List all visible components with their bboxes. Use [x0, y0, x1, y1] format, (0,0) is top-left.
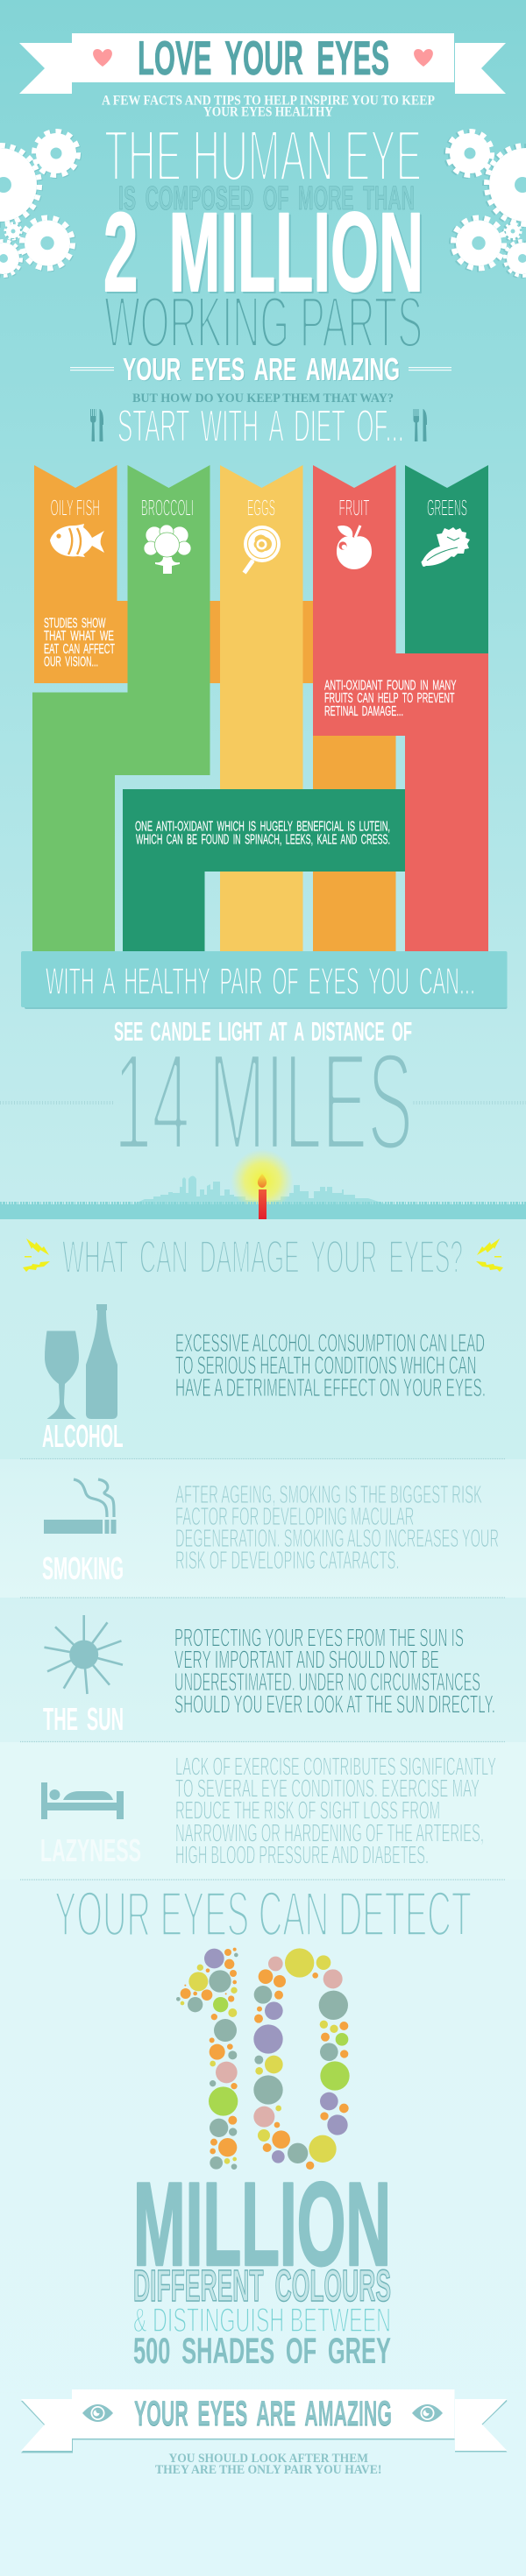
closing text	[155, 2451, 382, 2477]
digit one	[176, 1948, 238, 2170]
text: studies show: OUR VISION...	[44, 655, 98, 670]
ruler line left	[0, 1101, 114, 1105]
panel: alcohol	[42, 1304, 486, 1454]
label: alcohol: ALCOHOL	[42, 1418, 123, 1454]
icon: eye left	[82, 2404, 113, 2422]
number 10 made of coloured circles	[176, 1948, 350, 2170]
subtitle	[102, 93, 435, 119]
ribbon: eggs yellow	[220, 465, 303, 951]
food ribbon chart: GREENS	[427, 496, 467, 520]
icon: cutlery right	[414, 409, 427, 441]
text: lutein	[135, 820, 390, 848]
ruler line right	[414, 1101, 526, 1105]
food ribbon chart	[32, 465, 488, 951]
icon: gears right	[448, 131, 526, 276]
ribbon: broccoli green	[32, 465, 210, 951]
text: studies show: THAT WHAT WE	[44, 629, 114, 644]
ribbon: oily fish orange	[34, 465, 396, 951]
food ribbon chart: OILY FISH	[51, 496, 100, 520]
ribbon: greens dark green	[405, 465, 488, 653]
skyline and candle	[0, 1149, 526, 1219]
text: studies show: STUDIES SHOW	[44, 617, 106, 632]
icon: cutlery left	[90, 409, 103, 441]
divider	[20, 1879, 506, 1881]
icon: sun	[44, 1615, 123, 1694]
ground strip	[0, 1203, 526, 1219]
icon: frying pan with egg	[244, 526, 281, 571]
icon: cigarette	[44, 1479, 116, 1534]
text: anti-oxidant fruits	[324, 678, 456, 719]
icon: bed	[41, 1782, 124, 1819]
closing text: YOU SHOULD LOOK AFTER THEM	[168, 2451, 368, 2466]
label: the sun: THE SUN	[43, 1701, 124, 1737]
label: lazyness: LAZYNESS	[40, 1832, 141, 1868]
ribbon: greens lower box	[123, 789, 405, 951]
text: smoking body	[175, 1481, 499, 1575]
label: smoking: SMOKING	[42, 1550, 124, 1586]
subtitle: A FEW FACTS AND TIPS TO HELP INSPIRE YOU TO KEEP	[102, 93, 435, 109]
icon: eye right	[412, 2404, 443, 2422]
text: sun body	[174, 1624, 495, 1719]
panel: smoking	[42, 1479, 499, 1586]
divider	[20, 1457, 506, 1459]
food ribbon chart: FRUIT	[338, 496, 370, 520]
icon: broccoli	[144, 525, 191, 574]
panel: with a healthy pair of eyes	[21, 951, 507, 1009]
text: but how do you keep them: BUT HOW DO YOU KEEP THEM THAT WAY?	[132, 391, 394, 406]
icon: heart right	[414, 49, 433, 67]
bottom ribbon banner	[21, 2389, 507, 2452]
divider	[20, 1741, 506, 1743]
ribbon right tail	[455, 2399, 507, 2452]
icon: gears left	[0, 131, 78, 276]
panel: the sun	[43, 1615, 495, 1737]
icon: heart left	[93, 49, 112, 67]
ribbon left tail	[21, 2399, 73, 2452]
ribbon: fruit red	[313, 465, 488, 951]
food ribbon chart: BROCCOLI	[141, 496, 194, 520]
text: lazyness body	[175, 1754, 496, 1869]
icon: lightning left	[23, 1239, 50, 1272]
icon: wine glass and bottle	[45, 1304, 117, 1419]
icon: apple	[337, 526, 372, 569]
panel: lazyness	[40, 1754, 496, 1869]
icon: lightning right	[476, 1239, 503, 1272]
candle glow	[231, 1149, 294, 1212]
city skyline	[132, 1175, 390, 1205]
icon: fish	[50, 524, 104, 557]
closing text: THEY ARE THE ONLY PAIR YOU HAVE!	[155, 2462, 382, 2477]
candle	[258, 1174, 267, 1219]
icon: greens leaf	[421, 527, 470, 567]
text: anti-oxidant fruits: RETINAL DAMAGE...	[324, 704, 403, 719]
text: studies show: EAT CAN AFFECT	[44, 642, 115, 657]
subtitle: YOUR EYES HEALTHY	[203, 105, 333, 119]
food ribbon chart: EGGS	[247, 496, 275, 520]
text: studies show	[44, 617, 115, 670]
divider	[20, 1597, 506, 1599]
text: alcohol body	[175, 1330, 486, 1402]
digit zero	[253, 1948, 350, 2170]
top ribbon banner	[19, 31, 506, 94]
